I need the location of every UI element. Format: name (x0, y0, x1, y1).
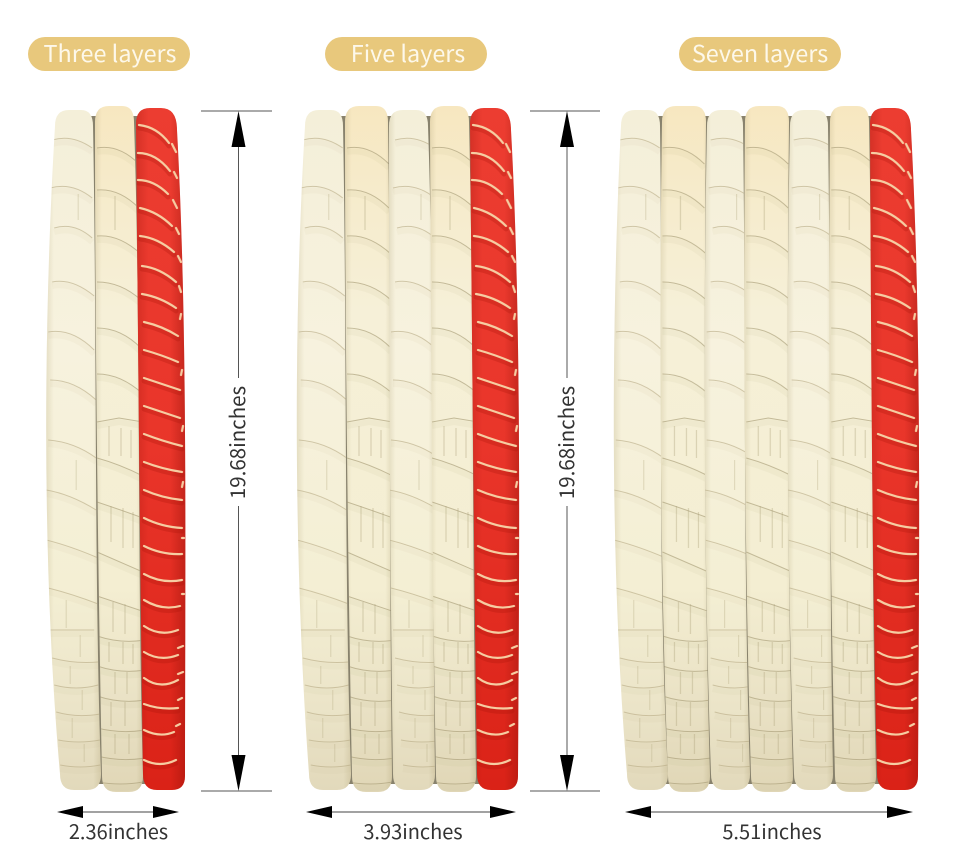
target: five layers (297, 106, 519, 792)
label: Five layers (325, 35, 487, 71)
width arrow: three layers, 2.36inches: 2.36inches (69, 816, 168, 845)
label: Five layers: Five layers (351, 35, 465, 69)
cream layer 1 of three (46, 110, 101, 790)
width arrow: three layers, 2.36inches (57, 806, 179, 845)
target: three layers (46, 106, 185, 792)
cream layer 3 of five (389, 110, 435, 790)
cream layer 2 of three (95, 106, 143, 792)
label: Seven layers: Seven layers (692, 35, 828, 69)
width arrow: seven layers, 5.51inches (625, 806, 913, 845)
label: Three layers: Three layers (44, 35, 177, 69)
cream layer 4 of seven (744, 106, 793, 792)
height arrow: three layers, 19.68inches: 19.68inches (221, 386, 251, 499)
red layer of five (470, 108, 519, 790)
cream layer 1 of five (297, 110, 351, 790)
cream layer 6 of seven (829, 106, 876, 792)
cream layer 5 of seven (788, 110, 833, 790)
width arrow: five layers, 3.93inches (306, 806, 516, 845)
cream layer 1 of seven (614, 110, 668, 790)
height arrow: five layers, 19.68inches (530, 111, 600, 791)
cream layer 2 of five (345, 106, 392, 792)
cream layer 2 of seven (660, 106, 710, 792)
cream layer 4 of five (430, 106, 476, 792)
height arrow: three layers, 19.68inches (201, 111, 272, 791)
cream layer 3 of seven (705, 110, 750, 790)
red layer of seven (870, 108, 919, 790)
height arrow: five layers, 19.68inches: 19.68inches (550, 386, 580, 499)
target: seven layers (614, 106, 919, 792)
width arrow: seven layers, 5.51inches: 5.51inches (722, 816, 822, 845)
red layer of three (136, 108, 185, 790)
width arrow: five layers, 3.93inches: 3.93inches (363, 816, 463, 845)
